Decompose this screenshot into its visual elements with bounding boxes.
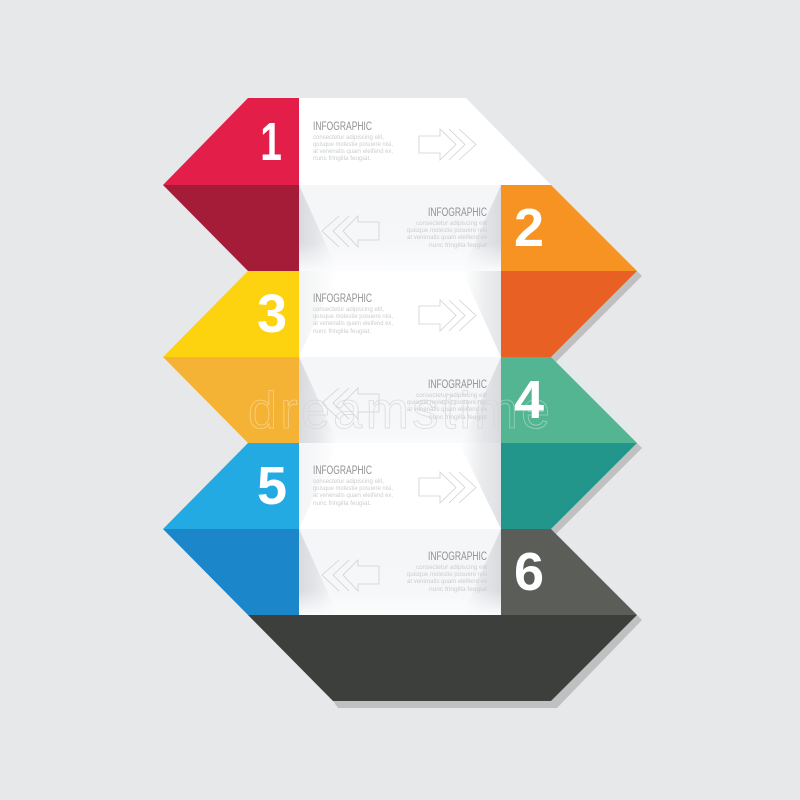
- number 3: 3: [257, 284, 287, 344]
- watermark: [250, 390, 548, 429]
- text block 5: [313, 463, 393, 507]
- number 6: 6: [514, 542, 544, 602]
- watermark: dreamstime: [248, 382, 550, 440]
- text block 6: INFOGRAPHIC: [428, 549, 487, 563]
- text block 1: consectetur adipiscing elit,: [313, 135, 384, 141]
- text block 4: INFOGRAPHIC: [428, 377, 487, 391]
- text block 6: at venenatis quam eleifend ex: [407, 579, 487, 585]
- text block 2: INFOGRAPHIC: [428, 205, 487, 219]
- text block 2: consectetur adipiscing elit: [416, 221, 487, 227]
- number 2: 2: [514, 198, 544, 258]
- text block 1: [313, 119, 393, 162]
- text block 2: [407, 205, 487, 249]
- text block 5: consectetur adipiscing elit,: [313, 479, 384, 485]
- text block 1: quisque molestie posuere nisi,: [313, 142, 393, 148]
- text block 5: INFOGRAPHIC: [313, 463, 372, 477]
- text block 2: quisque molestie posuere nisi: [407, 228, 487, 234]
- text block 4: quisque molestie posuere nisi: [407, 400, 487, 406]
- text block 4: consectetur adipiscing elit: [416, 393, 487, 399]
- step 5 chevron: [163, 443, 299, 615]
- text block 5: quisque molestie posuere nisi,: [313, 486, 393, 492]
- step 3 chevron: [163, 271, 299, 443]
- text block 3: [313, 291, 393, 335]
- text block 6: quisque molestie posuere nisi: [407, 572, 487, 578]
- text block 3: INFOGRAPHIC: [313, 291, 372, 305]
- arrow right 3: [419, 300, 476, 331]
- arrow right 5: [419, 472, 476, 503]
- text block 3: nunc fringilla feugiat.: [313, 329, 371, 335]
- text block 4: [407, 377, 487, 421]
- step 2 chevron: [501, 185, 637, 357]
- step 4 chevron: [501, 357, 637, 529]
- text block 3: consectetur adipiscing elit,: [313, 307, 384, 313]
- number 1: 1: [260, 111, 282, 171]
- text block 1: INFOGRAPHIC: [313, 119, 372, 133]
- text block 3: quisque molestie posuere nisi,: [313, 314, 393, 320]
- text block 2: at venenatis quam eleifend ex: [407, 235, 487, 241]
- arrow right 1: [419, 129, 476, 160]
- text block 6: nunc fringilla feugiat: [429, 587, 487, 593]
- text block 6: [407, 549, 487, 593]
- text block 4: nunc fringilla feugiat: [429, 415, 487, 421]
- arrow left 6: [322, 560, 379, 591]
- text block 6: consectetur adipiscing elit: [416, 565, 487, 571]
- shadows under right chevrons: [333, 271, 642, 708]
- number 4: 4: [514, 370, 544, 430]
- text block 3: at venenatis quam eleifend ex,: [313, 321, 393, 327]
- text block 2: nunc fringilla feugiat: [429, 243, 487, 249]
- text block 5: nunc fringilla feugiat.: [313, 501, 371, 507]
- watermark: dreamstime: [248, 382, 550, 440]
- text block 4: at venenatis quam eleifend ex: [407, 407, 487, 413]
- panel: white centre rows: [299, 98, 551, 615]
- arrow left 2: [322, 216, 379, 247]
- text block 5: at venenatis quam eleifend ex,: [313, 493, 393, 499]
- number 5: 5: [257, 456, 287, 516]
- step 6 chevron: [248, 529, 637, 701]
- text block 1: at venenatis quam eleifend ex,: [313, 149, 393, 155]
- arrow left 4: [322, 388, 379, 419]
- step 1 chevron: [163, 98, 299, 271]
- text block 1: nunc fringilla feugiat.: [313, 156, 371, 162]
